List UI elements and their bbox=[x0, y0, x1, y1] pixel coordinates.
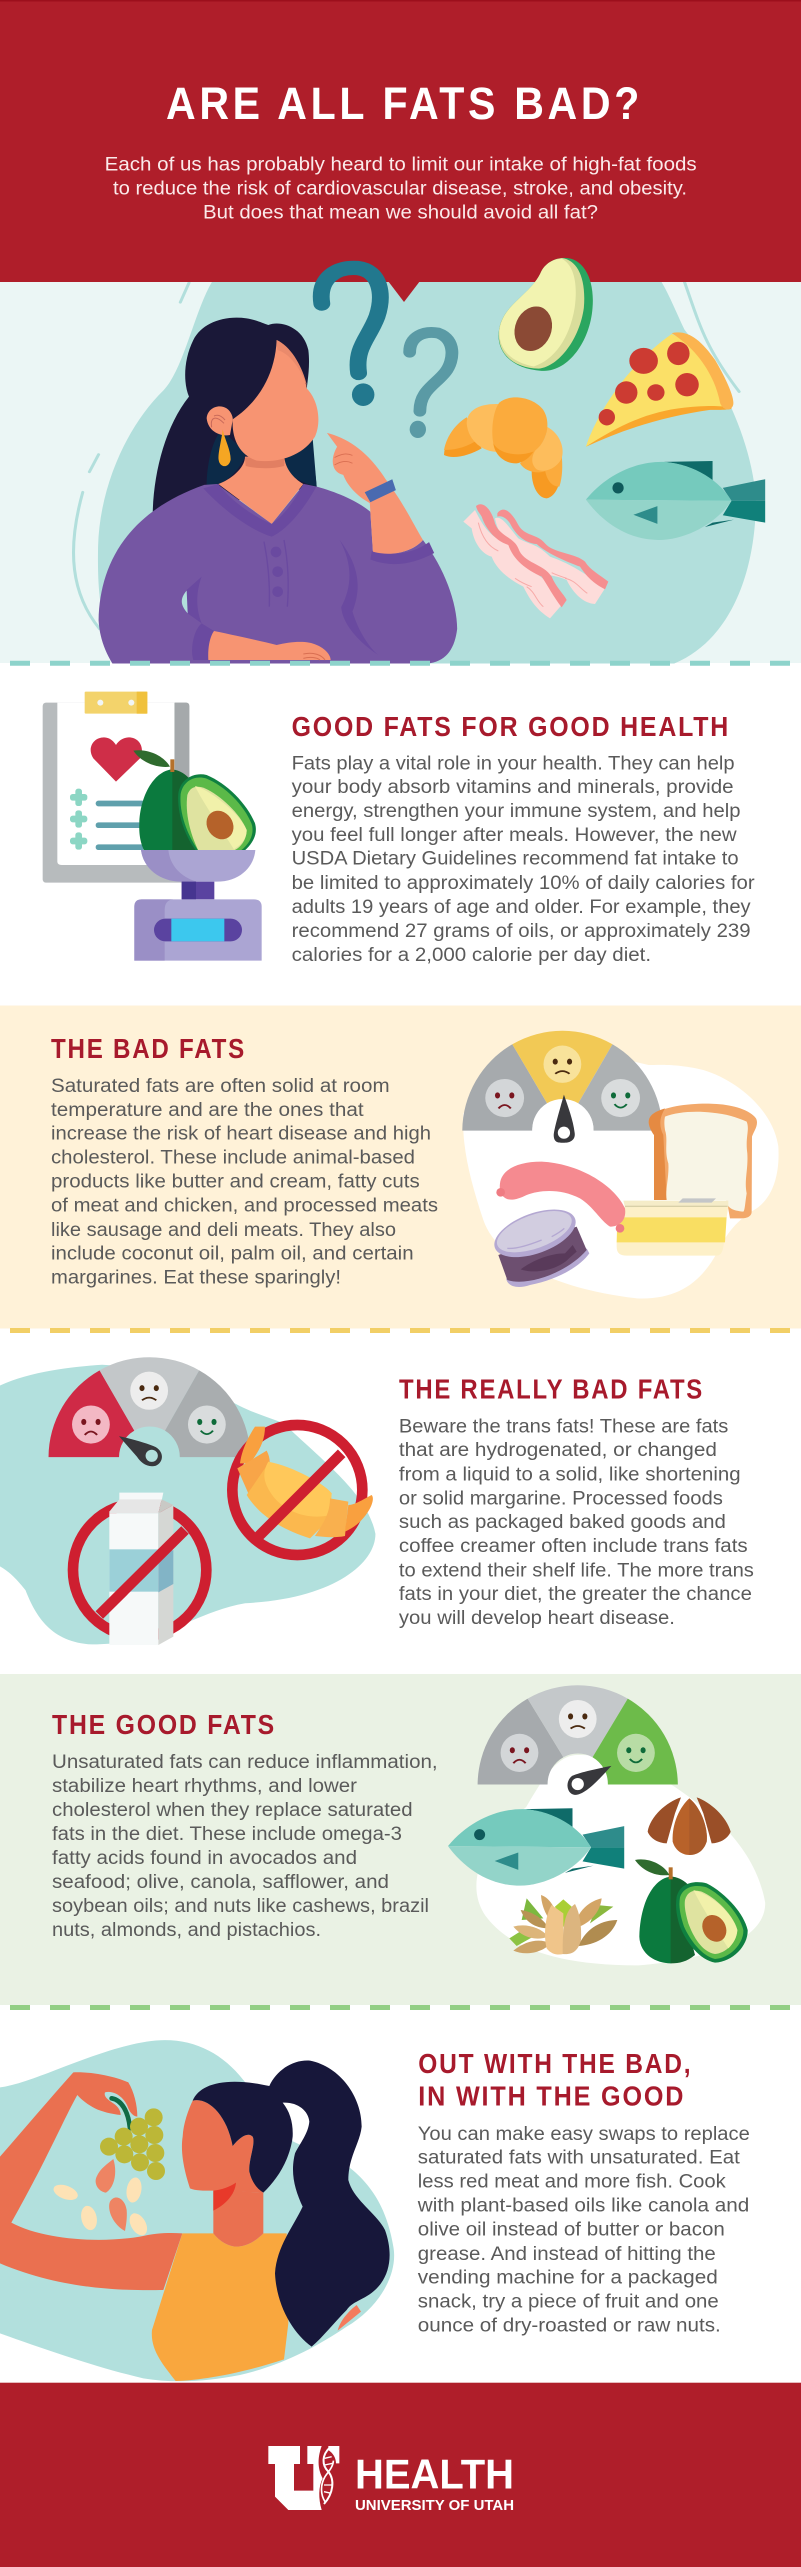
icon: fish bbox=[448, 1808, 624, 1886]
body text: olive oil instead of butter or bacon bbox=[418, 2220, 725, 2240]
body text: cholesterol. These include animal-based bbox=[51, 1148, 415, 1168]
body text: soybean oils; and nuts like cashews, brazil bbox=[52, 1896, 429, 1917]
body text bbox=[51, 1076, 438, 1289]
intro text bbox=[105, 154, 697, 224]
illustration: gauge, milk and croissant bbox=[0, 1357, 375, 1645]
illustration: woman eating grapes bbox=[0, 2040, 394, 2381]
body text: vending machine for a packaged bbox=[418, 2268, 718, 2289]
panel: the good fats bbox=[0, 1674, 801, 2008]
title: ARE ALL FATS BAD? bbox=[166, 78, 643, 129]
icon: canned fish bbox=[488, 1200, 589, 1287]
panel: the bad fats bbox=[0, 1006, 801, 1330]
gauge: yellow segment bbox=[462, 1031, 663, 1143]
body text: increase the risk of heart disease and high bbox=[51, 1124, 431, 1145]
icon: almonds bbox=[648, 1797, 731, 1855]
body text: grease. And instead of hitting the bbox=[418, 2244, 716, 2265]
heading: OUT WITH THE BAD, bbox=[418, 2048, 692, 2079]
body text: to extend their shelf life. The more trans bbox=[399, 1560, 754, 1581]
body text bbox=[399, 1416, 754, 1629]
icon: pistachios bbox=[509, 1895, 617, 1954]
no-sign: croissant bbox=[232, 1425, 373, 1555]
illustration: gauge and saturated foods bbox=[462, 1031, 779, 1298]
illustration: clipboard and scale bbox=[43, 692, 262, 961]
icon: pizza slice bbox=[586, 332, 733, 447]
icon: croissant bbox=[444, 397, 563, 498]
body text: ounce of dry-roasted or raw nuts. bbox=[418, 2316, 721, 2337]
body text: snack, try a piece of fruit and one bbox=[418, 2292, 719, 2313]
body text: Saturated fats are often solid at room bbox=[51, 1076, 390, 1097]
icon: bread bbox=[649, 1104, 757, 1218]
body text: stabilize heart rhythms, and lower bbox=[52, 1776, 358, 1797]
body text: Unsaturated fats can reduce inflammation, bbox=[52, 1752, 438, 1773]
body text: products like butter and cream, fatty cuts bbox=[51, 1172, 420, 1193]
panel: out with the bad, in with the good bbox=[0, 2040, 750, 2381]
body text: like sausage and deli meats. They also bbox=[51, 1220, 396, 1241]
heading: THE BAD FATS bbox=[51, 1033, 246, 1064]
illustration: woman thinking bbox=[99, 318, 457, 664]
body text: saturated fats with unsaturated. Eat bbox=[418, 2148, 741, 2169]
body text: calories for a 2,000 calorie per day diet. bbox=[292, 945, 651, 966]
heading: IN WITH THE GOOD bbox=[418, 2081, 685, 2112]
intro text: to reduce the risk of cardiovascular disease, stroke, and obesity. bbox=[113, 179, 687, 200]
body text: such as packaged baked goods and bbox=[399, 1512, 726, 1533]
body text: recommend 27 grams of oils, or approximately 239 bbox=[292, 921, 751, 942]
panel: footer bbox=[0, 2383, 801, 2567]
body text: Fats play a vital role in your health. They can help bbox=[292, 753, 735, 774]
icon: sausage bbox=[496, 1162, 625, 1233]
panel: red header bbox=[0, 0, 801, 302]
body text: or solid margarine. Processed foods bbox=[399, 1488, 723, 1509]
illustration: gauge and healthy foods bbox=[448, 1685, 765, 1965]
body text: you will develop heart disease. bbox=[399, 1608, 675, 1629]
icon: avocado bbox=[499, 258, 593, 371]
body text: nuts, almonds, and pistachios. bbox=[52, 1920, 321, 1941]
body text: USDA Dietary Guidelines recommend fat intake to bbox=[292, 849, 739, 870]
body text: coffee creamer often include trans fats bbox=[399, 1536, 748, 1557]
icon: almonds and peanuts bbox=[51, 2159, 151, 2238]
divider: green bbox=[10, 2005, 801, 2010]
logo: wordmark: UNIVERSITY OF UTAH bbox=[355, 2498, 514, 2514]
body text: include coconut oil, palm oil, and certain bbox=[51, 1244, 414, 1265]
icon: question marks bbox=[321, 268, 452, 438]
divider: teal bbox=[10, 661, 801, 666]
body text: of meat and chicken, and processed meats bbox=[51, 1196, 438, 1217]
body text: margarines. Eat these sparingly! bbox=[51, 1268, 341, 1289]
body text: adults 19 years of age and older. For example, they bbox=[292, 897, 751, 918]
icon: butter bbox=[617, 1198, 728, 1256]
body text bbox=[292, 753, 755, 966]
body text: cholesterol when they replace saturated bbox=[52, 1800, 413, 1821]
panel: the really bad fats bbox=[0, 1357, 754, 1645]
heading: THE REALLY BAD FATS bbox=[399, 1374, 704, 1404]
heading: GOOD FATS FOR GOOD HEALTH bbox=[292, 711, 730, 742]
panel: hero illustration bbox=[0, 282, 801, 664]
body text: your body absorb vitamins and minerals, provide bbox=[292, 777, 734, 798]
hero background blob bbox=[98, 282, 756, 664]
divider: yellow bbox=[10, 1328, 801, 1333]
icon: grapes bbox=[100, 2098, 165, 2180]
logo: wordmark: HEALTH bbox=[355, 2450, 514, 2498]
logo: U mark bbox=[268, 2446, 339, 2510]
gauge: green segment bbox=[478, 1685, 678, 1795]
body text: temperature and are the ones that bbox=[51, 1100, 364, 1121]
body text: fatty acids found in avocados and bbox=[52, 1848, 357, 1869]
body text: Beware the trans fats! These are fats bbox=[399, 1416, 728, 1437]
body text: energy, strengthen your immune system, and help bbox=[292, 801, 741, 822]
no-sign: milk carton bbox=[73, 1493, 206, 1645]
body text: that are hydrogenated, or changed bbox=[399, 1440, 717, 1461]
body text: from a liquid to a solid, like shortening bbox=[399, 1464, 741, 1486]
body text: with plant-based oils like canola and bbox=[417, 2196, 749, 2217]
body text: be limited to approximately 10% of daily calories for bbox=[292, 873, 755, 894]
intro text: Each of us has probably heard to limit our intake of high-fat foods bbox=[105, 154, 697, 175]
icon: avocado bbox=[635, 1859, 748, 1963]
body text: fats in the diet. These include omega-3 bbox=[52, 1824, 402, 1845]
body text: less red meat and more fish. Cook bbox=[418, 2172, 726, 2193]
body text: fats in your diet, the greater the chance bbox=[399, 1584, 752, 1605]
heading: THE GOOD FATS bbox=[52, 1709, 276, 1740]
body text: You can make easy swaps to replace bbox=[418, 2124, 750, 2145]
panel: good fats for good health bbox=[43, 692, 755, 966]
body text bbox=[52, 1752, 438, 1941]
icon: fish bbox=[586, 461, 765, 540]
body text bbox=[417, 2124, 750, 2337]
body text: seafood; olive, canola, safflower, and bbox=[52, 1872, 389, 1893]
body text: you feel full longer after meals. However, the new bbox=[292, 825, 737, 846]
intro text: But does that mean we should avoid all fat? bbox=[203, 203, 598, 224]
icon: bacon bbox=[463, 504, 608, 618]
heading bbox=[418, 2048, 692, 2112]
gauge: red segment bbox=[49, 1357, 250, 1466]
